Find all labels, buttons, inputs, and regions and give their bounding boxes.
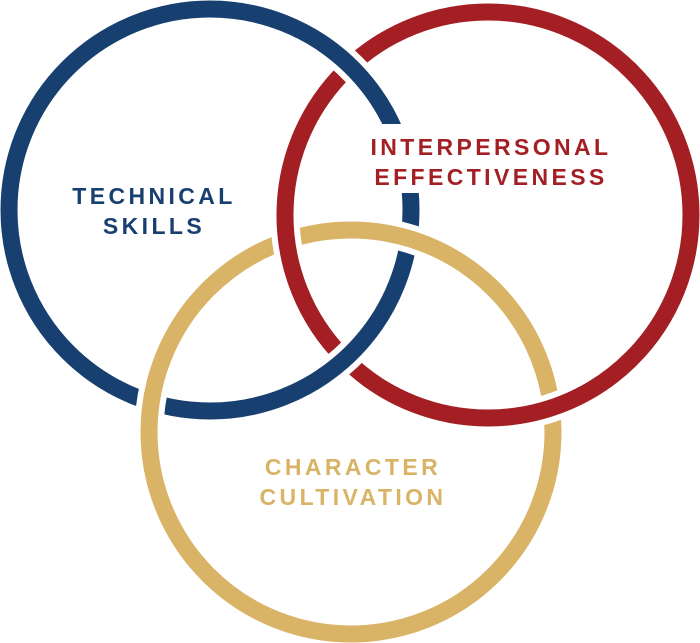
- label: interpersonal effectiveness: [370, 134, 612, 190]
- circle: character cultivation: [149, 230, 553, 634]
- label: technical skills: [72, 183, 236, 239]
- crossing overlays: [149, 45, 577, 432]
- text backdrop: [365, 124, 615, 193]
- label: interpersonal effectiveness: INTERPERSONAL: [370, 134, 612, 160]
- label: interpersonal effectiveness: EFFECTIVENESS: [374, 164, 608, 190]
- label: technical skills: SKILLS: [103, 213, 205, 239]
- circle: interpersonal effectiveness: [285, 12, 691, 418]
- circle: technical skills: [9, 9, 411, 411]
- label: character cultivation: [260, 454, 446, 510]
- label: character cultivation: CHARACTER: [265, 454, 441, 480]
- label: character cultivation: CULTIVATION: [260, 484, 446, 510]
- label: technical skills: TECHNICAL: [72, 183, 236, 209]
